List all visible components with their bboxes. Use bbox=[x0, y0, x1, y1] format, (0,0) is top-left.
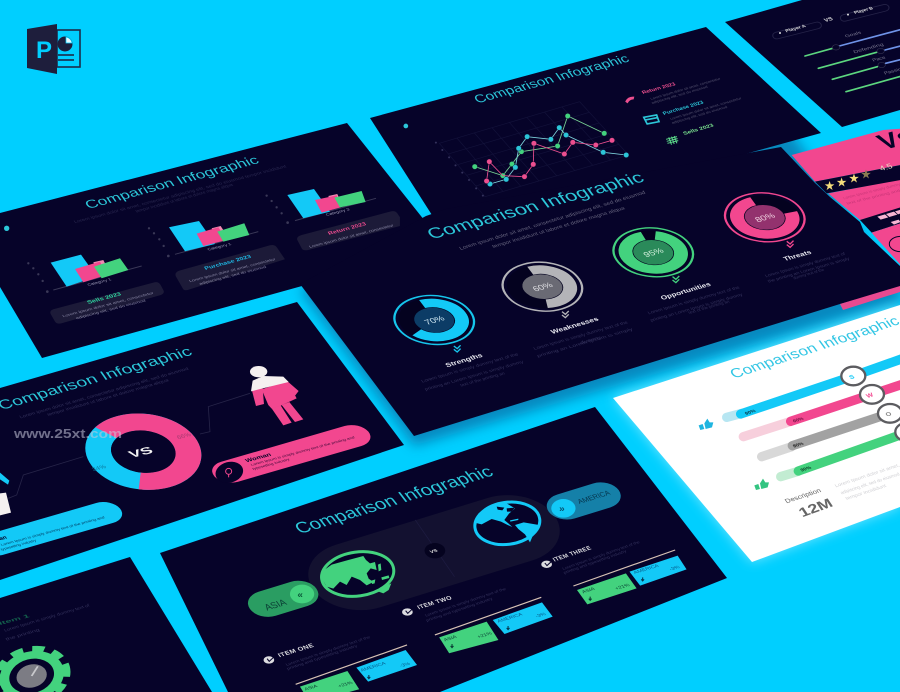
item one: AMERICA bbox=[360, 661, 388, 673]
bar: opportunities: O bbox=[884, 411, 893, 418]
player B pill: Player B bbox=[853, 6, 875, 16]
chart grid bbox=[439, 102, 629, 197]
item three: printing and typesetting industry bbox=[562, 549, 628, 575]
label: opportunities: printing an Lorem Ipsum is simply dummy bbox=[649, 292, 745, 323]
ring: weaknesses 60% bbox=[488, 254, 596, 319]
america pill: AMERICA bbox=[576, 489, 612, 505]
legend: sells bbox=[666, 123, 715, 145]
panel: line chart bbox=[370, 27, 821, 237]
icon: gear bbox=[0, 642, 72, 692]
icon: green thumb bbox=[754, 479, 769, 490]
label: weaknesses: dummy bbox=[579, 335, 603, 345]
description lines bbox=[834, 463, 900, 502]
item two bbox=[402, 587, 553, 653]
label: threats: the printing an Lorem Ipsum is simply bbox=[767, 256, 852, 284]
label: weaknesses: Lorem Ipsum is simply dummy text of the bbox=[533, 320, 630, 351]
stat labels: Pace bbox=[871, 55, 887, 63]
label: threats: Lorem Ipsum is simply dummy text of bbox=[764, 251, 847, 279]
panel: globe comparison bbox=[160, 407, 727, 692]
icon: man figure bbox=[0, 473, 11, 515]
chart: category 1 purchase: adipiscing elit, sed do eiusmod bbox=[198, 264, 268, 286]
bar: opportunities: 80% bbox=[792, 441, 806, 449]
watermark: www.25xt.com bbox=[13, 426, 122, 441]
panel: bar charts bbox=[0, 123, 440, 358]
item one: ITEM ONE bbox=[277, 643, 316, 659]
gear text: the printing bbox=[5, 627, 41, 641]
man pill: typesetting industry bbox=[0, 538, 37, 551]
item one: +21% bbox=[337, 680, 355, 689]
legend: return: adipiscing elit, sed do eiusmod bbox=[650, 85, 709, 105]
icon: cyan thumb bbox=[699, 419, 713, 430]
legend: purchase: Purchase 2023 bbox=[662, 100, 705, 116]
bar: strengths: S bbox=[848, 374, 857, 381]
ring: strengths 70% bbox=[380, 288, 488, 352]
intro lines: Lorem ipsum dolor sit amet, consectetur adipiscing elit, sed do eiusmod bbox=[19, 366, 190, 420]
bottom pink strip bbox=[840, 286, 900, 310]
label: strengths: Strengths bbox=[444, 352, 484, 369]
panel: swot rings bbox=[300, 147, 900, 436]
woman pill: Lorem Ipsum is simply dummy text of the printing and bbox=[250, 435, 355, 467]
axis ticks bbox=[435, 142, 484, 197]
label: weaknesses bbox=[533, 316, 635, 359]
bar: threats bbox=[781, 423, 900, 477]
item one: printing and typesetting industry bbox=[286, 643, 359, 671]
stat labels: Goals bbox=[844, 30, 863, 39]
chart: category 1 purchase bbox=[148, 221, 285, 290]
chart: category 1 sells: adipiscing elit, sed do eiusmod bbox=[75, 298, 147, 320]
rating stars: ★ bbox=[824, 179, 835, 193]
label: weaknesses: Weaknesses bbox=[549, 316, 600, 335]
stat labels: Defending bbox=[852, 42, 885, 55]
chart: category 3 return bbox=[265, 189, 400, 250]
chart: category 1 sells: Lorem ipsum dolor sit amet, consectetur bbox=[61, 291, 155, 318]
globe: america bbox=[472, 498, 543, 549]
title: Comparison Infographic bbox=[291, 463, 497, 538]
icon: powerpoint logo bbox=[27, 24, 80, 74]
stat labels bbox=[844, 30, 900, 76]
item three bbox=[541, 540, 687, 604]
donut centre label: VS bbox=[126, 445, 156, 460]
label: strengths: text of the printing an bbox=[459, 371, 507, 388]
bar: weaknesses bbox=[743, 384, 900, 437]
america pill bbox=[540, 478, 627, 524]
label: strengths: printing an Lorem Ipsum is simply dummy bbox=[424, 359, 525, 392]
rating value: 4.5 bbox=[877, 161, 895, 173]
slide marker bbox=[4, 226, 9, 231]
description lines: tempor incididunt bbox=[845, 484, 888, 502]
legend: purchase bbox=[644, 96, 743, 125]
chart: category 1 sells bbox=[27, 255, 164, 324]
ring: threats 80%: 80% bbox=[753, 211, 777, 224]
label: threats: Threats bbox=[782, 249, 813, 262]
chart: category 3 return: Return 2023 bbox=[327, 222, 368, 236]
item two: Lorem Ipsum is simply dummy text of the bbox=[424, 587, 507, 617]
panel: rating versus bbox=[792, 124, 900, 265]
connector lines bbox=[8, 393, 250, 498]
gear text bbox=[0, 603, 91, 641]
chart: category 1 sells: Sells 2023 bbox=[86, 292, 123, 305]
legend: return bbox=[625, 76, 722, 105]
donut chart bbox=[62, 400, 225, 503]
bar: strengths: 90% bbox=[744, 408, 758, 417]
chevron: weaknesses bbox=[562, 311, 569, 318]
chart: category 3 return: Lorem ipsum dolor sit amet, consectetur bbox=[308, 223, 395, 249]
description lines: text of the printing and bbox=[845, 188, 900, 205]
panel shadow bbox=[300, 130, 900, 446]
man pill bbox=[0, 499, 128, 559]
pink body bbox=[828, 179, 900, 220]
rating stars: ★ bbox=[836, 175, 847, 189]
ring: opportunities 95% bbox=[599, 220, 707, 285]
ring: strengths 70%: 70% bbox=[422, 314, 447, 326]
item two: printing and typesetting industry bbox=[425, 596, 494, 622]
stat sliders bbox=[805, 29, 900, 92]
woman pill: Woman bbox=[245, 452, 273, 464]
ring: threats 80% bbox=[711, 185, 819, 250]
rating stars bbox=[824, 168, 872, 193]
panel: gender vs donut bbox=[0, 302, 404, 580]
asia pill: ASIA bbox=[262, 598, 290, 613]
chart: category 1 purchase: Category 1 bbox=[206, 242, 233, 251]
asia pill bbox=[241, 577, 325, 621]
legend: purchase: adipiscing elit, sed do eiusmod bbox=[670, 105, 728, 125]
legend: return: Lorem ipsum dolor sit amet, consectetur bbox=[649, 76, 722, 101]
globe: asia bbox=[319, 547, 397, 601]
item two: ITEM TWO bbox=[416, 595, 454, 611]
chevron: opportunities bbox=[673, 276, 679, 283]
title: Comparison Infographic bbox=[471, 51, 632, 106]
bar: weaknesses: W bbox=[865, 392, 876, 400]
label: opportunities: text of the printing an bbox=[687, 299, 731, 315]
label: opportunities: Opportunities bbox=[659, 281, 712, 301]
bar: strengths bbox=[727, 358, 900, 417]
icon: powerpoint logo: P bbox=[36, 37, 52, 64]
panel: gear bbox=[0, 557, 212, 692]
label: weaknesses: printing an Lorem Ipsum is simply bbox=[536, 327, 635, 359]
intro lines: Lorem ipsum dolor sit amet, consectetur adipiscing elit, sed do eiusmod bbox=[459, 190, 647, 251]
rating band bbox=[815, 165, 900, 193]
ring: opportunities 95%: 95% bbox=[641, 246, 666, 259]
globes backing pill bbox=[291, 484, 577, 621]
item one bbox=[264, 635, 417, 692]
title: Comparison Infographic bbox=[82, 153, 262, 211]
panel: player comparison bbox=[725, 0, 900, 127]
chevron: threats bbox=[787, 241, 794, 247]
item one: Lorem Ipsum is simply dummy text of the bbox=[285, 635, 372, 667]
globes backing pill: VS bbox=[429, 548, 440, 555]
item two: -3% bbox=[535, 612, 548, 619]
label: strengths: Lorem Ipsum is simply dummy text of the bbox=[420, 352, 520, 384]
slide marker bbox=[403, 124, 408, 128]
label: strengths bbox=[420, 352, 525, 392]
item two: ASIA bbox=[443, 634, 459, 643]
label: opportunities: Lorem Ipsum is simply dummy text of the bbox=[647, 285, 741, 316]
player A pill: Player A bbox=[784, 24, 808, 34]
chart: category 1 purchase: Purchase 2023 bbox=[204, 255, 253, 271]
bar: weaknesses: 60% bbox=[792, 416, 806, 424]
item two: AMERICA bbox=[496, 612, 524, 624]
description label: Description bbox=[783, 486, 823, 505]
chart: category 1 sells: Category 1 bbox=[86, 277, 113, 287]
chart: category 1 purchase: Lorem ipsum dolor sit amet, consectetur bbox=[188, 257, 277, 283]
series: pink bbox=[484, 138, 615, 184]
series: cyan bbox=[487, 125, 629, 187]
item two: +21% bbox=[476, 631, 494, 640]
series: green bbox=[472, 113, 607, 178]
item three: -3% bbox=[668, 565, 682, 572]
item three: ASIA bbox=[581, 586, 597, 595]
chart: category 3 return: Category 3 bbox=[325, 207, 351, 217]
title: Comparison Infographic bbox=[423, 168, 648, 242]
bar: opportunities bbox=[762, 404, 900, 457]
intro lines: tempor incididunt ut labore et dolore magna aliqua bbox=[491, 206, 627, 249]
label: opportunities bbox=[647, 281, 745, 323]
legend: sells: Sells 2023 bbox=[682, 123, 715, 136]
chevron: strengths bbox=[454, 345, 461, 352]
item three: AMERICA bbox=[633, 563, 661, 575]
woman pill bbox=[206, 422, 377, 486]
item three: +21% bbox=[614, 583, 632, 591]
item three: ITEM THREE bbox=[552, 545, 593, 563]
intro lines: tempor incididunt ut labore et dolore magna aliqua bbox=[135, 183, 235, 214]
gear text: Lorem Ipsum is simply dummy text of bbox=[3, 603, 91, 632]
legend: return: Return 2023 bbox=[641, 82, 677, 95]
pink header bbox=[792, 129, 900, 182]
intro lines: Lorem ipsum dolor sit amet, consectetur adipiscing elit, sed do eiusmod tempor incididunt bbox=[73, 164, 288, 225]
legend: purchase: Lorem ipsum dolor sit amet, consectetur bbox=[669, 96, 743, 121]
panel: white skill bars bbox=[613, 305, 900, 562]
item three: Lorem Ipsum is simply dummy text of the bbox=[561, 540, 641, 571]
man pill: Lorem Ipsum is simply dummy text of the printing and bbox=[0, 515, 106, 547]
item one: ASIA bbox=[304, 684, 319, 692]
asia pill: « bbox=[297, 590, 303, 600]
donut value 66%: 66% bbox=[176, 432, 193, 441]
woman pill: typesetting industry bbox=[251, 457, 291, 471]
title: Comparison Infographic bbox=[0, 345, 196, 413]
vs label: VS bbox=[823, 17, 834, 24]
icon: woman figure bbox=[250, 366, 303, 425]
item one: -3% bbox=[399, 661, 412, 669]
rating blocks bbox=[860, 207, 900, 265]
ring: weaknesses 60%: 60% bbox=[530, 281, 555, 293]
label: threats: dummy text of the bbox=[792, 268, 826, 281]
big number: 12M bbox=[796, 497, 836, 520]
rating stars: ★ bbox=[848, 172, 860, 186]
bar: threats: 90% bbox=[800, 465, 813, 473]
america pill: » bbox=[559, 504, 565, 515]
donut value 34%: 34% bbox=[91, 464, 108, 473]
rating stars: ★ bbox=[860, 168, 872, 182]
intro lines: tempor incididunt ut labore et dolore magna aliqua bbox=[46, 378, 170, 417]
